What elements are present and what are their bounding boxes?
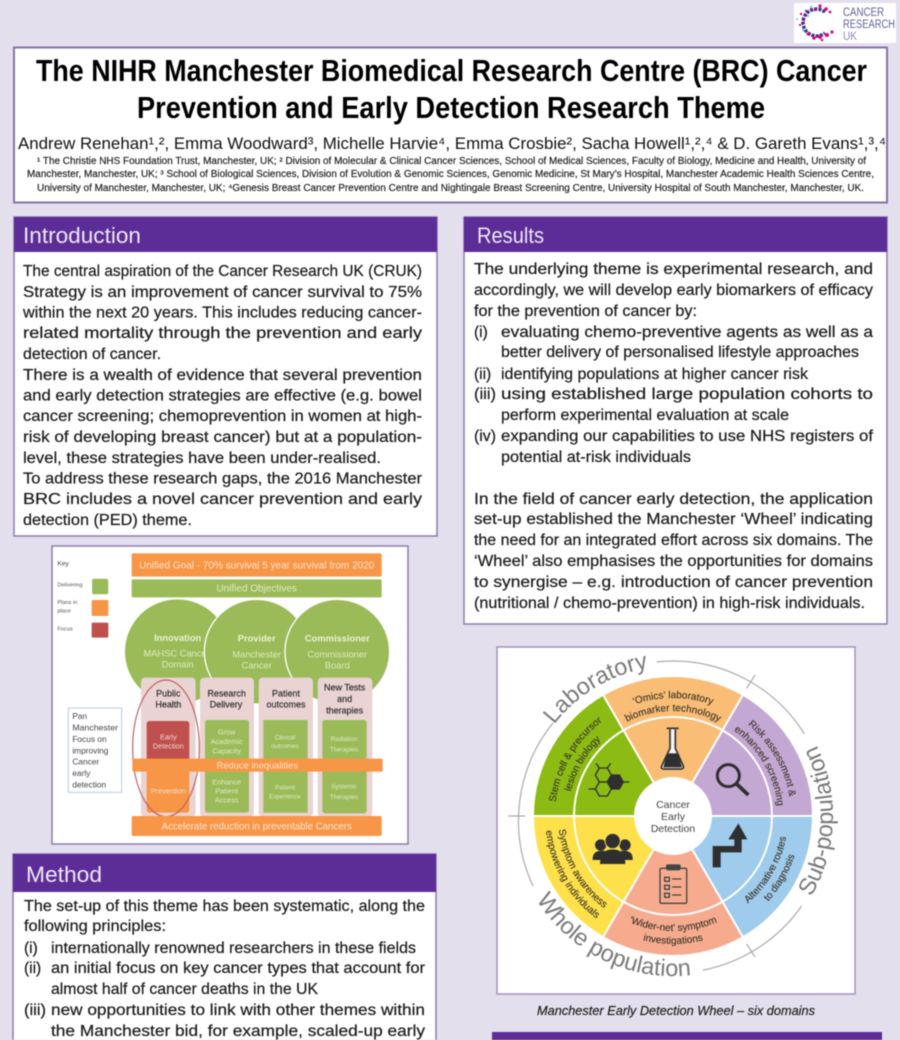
heading: method: Method <box>26 862 102 887</box>
text: results wheel paragraph: set-up established the Manchester ‘Wheel’ indicating <box>474 511 873 528</box>
wedge: wider-net: ‘Wider-net’ symptom <box>630 916 718 934</box>
panel: introduction <box>14 217 437 536</box>
logo: Cancer Research UK: CANCER <box>843 7 884 19</box>
heading: method <box>13 854 436 892</box>
wedge: alternative routes: to diagnosis <box>763 854 795 902</box>
wedge: symptom awareness: Symptom awareness <box>557 828 608 908</box>
text: results list: (iii) <box>474 386 496 403</box>
icon: clipboard <box>660 865 687 903</box>
heading: introduction: Introduction <box>23 223 141 248</box>
column: research delivery: Patient <box>215 786 238 795</box>
band: accelerate reduction <box>132 816 382 836</box>
column: new tests and therapies: therapies <box>326 705 364 715</box>
outer label: Sub-population: Sub-population <box>798 746 838 895</box>
column: patient outcomes: Experience <box>269 793 301 800</box>
text: results wheel paragraph: the need for an integrated effort across six domains. The <box>474 532 873 549</box>
focus ellipse <box>133 680 199 817</box>
wedge: omics: biomarker technology <box>624 704 722 723</box>
circle: commissioner: Commissioner <box>305 634 370 644</box>
wheel hub: Cancer <box>656 799 690 811</box>
circle: provider: Provider <box>238 634 276 644</box>
heading: results: Results <box>477 223 544 248</box>
text: results list: (i) <box>474 324 488 341</box>
legend key: Plans in <box>57 600 77 606</box>
title: Prevention and Early Detection Research Theme <box>137 90 765 125</box>
text: introduction body: related mortality through the prevention and early <box>23 325 422 342</box>
text: method list: The set-up of this theme has been systematic, along the <box>24 898 425 915</box>
callout: pan Manchester focus: Pan <box>72 711 88 721</box>
text: introduction body: level, these strategies have been under-realised. <box>23 450 381 467</box>
circle: provider: Manchester <box>232 649 281 659</box>
logo: Cancer Research UK <box>794 3 896 43</box>
text: method list: new opportunities to link with other themes within <box>51 1002 425 1019</box>
text: method list: (i) <box>24 940 38 957</box>
wedge: risk assessment <box>693 696 812 816</box>
wedge: stem cell biology: Stem cell & precursor <box>548 716 602 802</box>
text: introduction body: BRC includes a novel cancer prevention and early <box>23 491 422 508</box>
column: research delivery: Research <box>207 689 246 699</box>
panel: results <box>464 217 887 624</box>
column: research delivery: Academic <box>211 737 243 746</box>
callout: pan Manchester focus: Focus on <box>72 734 107 744</box>
column: patient outcomes: outcomes <box>271 743 299 750</box>
authors: Andrew Renehan¹,², Emma Woodward³, Michelle Harvie⁴, Emma Crosbie², Sacha Howell¹,²,⁴ & D. Gareth Evans¹,³,⁴ <box>18 135 886 153</box>
column: patient outcomes: outcomes <box>267 700 306 710</box>
wedge: alternative routes: Alternative routes <box>744 836 786 904</box>
column: research delivery <box>200 678 254 817</box>
panel: Manchester strategy diagram <box>52 546 408 844</box>
column: new tests and therapies: Radiation <box>331 736 358 743</box>
legend key <box>57 560 108 638</box>
text: results wheel paragraph: (nutritional / chemo-prevention) in high-risk individuals. <box>474 595 865 612</box>
wedge: risk assessment: enhanced screening <box>734 726 784 806</box>
icon: flask <box>661 728 683 769</box>
legend key: Focus <box>57 627 73 633</box>
text: introduction body: cancer screening; chemoprevention in women at high- <box>23 408 422 425</box>
affiliations: ¹ The Christie NHS Foundation Trust, Manchester, UK; ² Division of Molecular & Clinical Cancer Sciences, School of Medical Sciences, Faculty of Biology, Medicine and Health, University of <box>37 156 866 167</box>
wedge: stem cell biology: lesion biology <box>564 736 600 792</box>
column: public health: Prevention <box>151 786 186 795</box>
column: research delivery: Enhance <box>212 777 241 786</box>
callout: pan Manchester focus: improving <box>72 745 109 755</box>
wedge: stem cell biology <box>533 696 654 816</box>
circle: innovation <box>125 599 230 704</box>
circle: commissioner <box>285 599 390 704</box>
wedge: omics <box>604 676 742 782</box>
text: method list: internationally renowned researchers in these fields <box>51 940 416 957</box>
goal banner <box>132 553 382 577</box>
text: results list: The underlying theme is experimental research, and <box>474 261 873 278</box>
callout: pan Manchester focus: detection <box>72 779 107 789</box>
goal banner: Unified Goal - 70% survival 5 year survival from 2020 <box>139 560 375 571</box>
text: results list: expanding our capabilities to use NHS registers of <box>501 428 874 445</box>
text: results list: identifying populations at higher cancer risk <box>501 366 808 383</box>
column: new tests and therapies: Therapies <box>330 794 358 801</box>
heading bar: next panel (cropped) <box>492 1032 882 1040</box>
text: introduction body <box>22 263 422 529</box>
circle: provider: Cancer <box>242 660 272 670</box>
circle: innovation: Innovation <box>154 633 202 643</box>
panel: method <box>13 854 436 1040</box>
column: public health: Detection <box>153 742 184 751</box>
band: accelerate reduction: Accelerate reduction in preventable Cancers <box>162 821 352 832</box>
text: introduction body: Strategy is an improvement of cancer survival to 75% <box>23 284 422 301</box>
text: introduction body: detection of cancer. <box>23 346 161 363</box>
objectives banner: Unified Objectives <box>216 583 297 594</box>
text: method list: (ii) <box>24 960 41 977</box>
wedge: wider-net: investigations <box>642 932 704 947</box>
legend key: Key <box>57 560 69 567</box>
heading: results <box>464 217 887 252</box>
column: new tests and therapies: New Tests <box>324 683 366 693</box>
heading: introduction <box>14 217 437 252</box>
column: patient outcomes: Patient <box>275 785 295 792</box>
column: public health <box>141 678 196 817</box>
text: introduction body: To address these research gaps, the 2016 Manchester <box>23 470 422 488</box>
text: results list: better delivery of personalised lifestyle approaches <box>501 344 859 361</box>
column: public health: Health <box>155 700 181 710</box>
wedge: symptom awareness <box>533 816 654 936</box>
title <box>36 53 867 125</box>
text: introduction body: There is a wealth of evidence that several prevention <box>23 367 422 384</box>
text: results list <box>474 261 874 466</box>
text: results list: perform experimental evaluation at scale <box>501 407 789 424</box>
callout: pan Manchester focus <box>68 708 122 792</box>
column: research delivery: Delivery <box>210 700 243 710</box>
text: method list: following principles: <box>24 918 166 935</box>
text: method list: the Manchester bid, for example, scaled-up early <box>51 1023 425 1040</box>
affiliations: University of Manchester, Manchester, UK; ⁴Genesis Breast Cancer Prevention Centre and Nightingale Breast Screening Centre, University Hospital of South Manchester, Manchester, UK. <box>37 183 864 194</box>
affiliations: Manchester, Manchester, UK; ³ School of Biological Sciences, Division of Evolution & Genomic Sciences, Genomic Medicine, St Mary’s Hospital, Manchester Academic Health Sciences Centre, <box>27 169 874 180</box>
callout: pan Manchester focus: early <box>72 768 91 778</box>
column: patient outcomes: Patient <box>272 689 300 699</box>
text: results list: (iv) <box>474 428 496 445</box>
text: method list <box>24 898 425 1040</box>
band: reduce inequalities: Reduce inequalities <box>217 761 298 771</box>
text: results list: potential at-risk individuals <box>501 449 691 466</box>
circle: provider <box>204 599 309 704</box>
outer label: Whole population: Whole population <box>538 890 690 977</box>
objectives banner <box>132 579 382 597</box>
logo: Cancer Research UK: UK <box>843 31 857 43</box>
text: results list: (ii) <box>474 366 491 383</box>
callout: pan Manchester focus: Manchester <box>72 722 118 732</box>
text: introduction body: within the next 20 years. This includes reducing cancer- <box>22 304 422 322</box>
circle: commissioner: Board <box>325 660 350 670</box>
wedge: wider-net <box>604 850 742 956</box>
circle: innovation: Domain <box>162 659 194 669</box>
column: patient outcomes <box>259 678 313 817</box>
circle: innovation: MAHSC Cancer <box>143 649 210 659</box>
text: introduction body: detection (PED) theme. <box>23 512 192 529</box>
column: public health: Public <box>156 689 181 699</box>
text: results wheel paragraph <box>474 491 873 612</box>
text: method list: (iii) <box>24 1002 46 1019</box>
band: reduce inequalities <box>132 759 383 772</box>
wheel hub: Early <box>661 811 686 823</box>
text: method list: an initial focus on key cancer types that account for <box>51 960 425 977</box>
text: introduction body: risk of developing breast cancer) but at a population- <box>23 429 422 446</box>
icon: arrow route <box>713 823 747 867</box>
panel: Manchester Early Detection Wheel <box>496 646 856 996</box>
column: new tests and therapies: Therapies <box>330 746 358 753</box>
icon: magnifier <box>717 765 748 795</box>
text: results list: accordingly, we will develop early biomarkers of efficacy <box>474 282 873 299</box>
callout: pan Manchester focus: Cancer <box>72 757 99 767</box>
caption: wheel: Manchester Early Detection Wheel – six domains <box>537 1004 815 1018</box>
text: introduction body: and early detection strategies are effective (e.g. bowel <box>23 388 422 404</box>
wedge: alternative routes <box>693 816 812 936</box>
text: method list: almost half of cancer deaths in the UK <box>51 981 319 998</box>
wheel hub: Detection <box>651 823 695 835</box>
column: new tests and therapies: and <box>337 694 352 704</box>
column: research delivery: Capacity <box>212 746 241 755</box>
text: results list: using established large population cohorts to <box>501 386 873 403</box>
legend key: place <box>57 609 71 615</box>
circle: commissioner: Commissioner <box>308 649 367 659</box>
wedge: symptom awareness: empowering individuals <box>545 830 600 919</box>
text: results wheel paragraph: to synergise – e.g. introduction of cancer prevention <box>474 574 873 591</box>
text: results wheel paragraph: ‘Wheel’ also emphasises the opportunities for domains <box>474 553 873 570</box>
wedge: omics: ‘Omics’ laboratory <box>632 690 714 706</box>
text: results wheel paragraph: In the field of cancer early detection, the application <box>474 491 873 508</box>
icon: molecule <box>589 763 629 796</box>
text: introduction body: The central aspiration of the Cancer Research UK (CRUK) <box>23 263 422 280</box>
outer label: Laboratory: Laboratory <box>542 655 646 724</box>
column: research delivery: Grow <box>218 728 236 737</box>
column: new tests and therapies <box>318 678 372 817</box>
legend key: Delivering <box>57 583 82 589</box>
affiliations <box>27 156 874 194</box>
column: patient outcomes: Clinical <box>275 735 295 742</box>
column: research delivery: Access <box>215 796 239 805</box>
text: results list: evaluating chemo-preventive agents as well as a <box>501 324 873 341</box>
wheel hub <box>634 777 712 855</box>
column: new tests and therapies: Systemic <box>331 784 357 791</box>
wedge: risk assessment: Risk assessment & <box>748 720 796 798</box>
icon: people <box>593 833 633 864</box>
panel: title block <box>14 48 887 202</box>
column: public health: Early <box>160 732 177 741</box>
text: results list: for the prevention of cancer by: <box>474 303 697 320</box>
